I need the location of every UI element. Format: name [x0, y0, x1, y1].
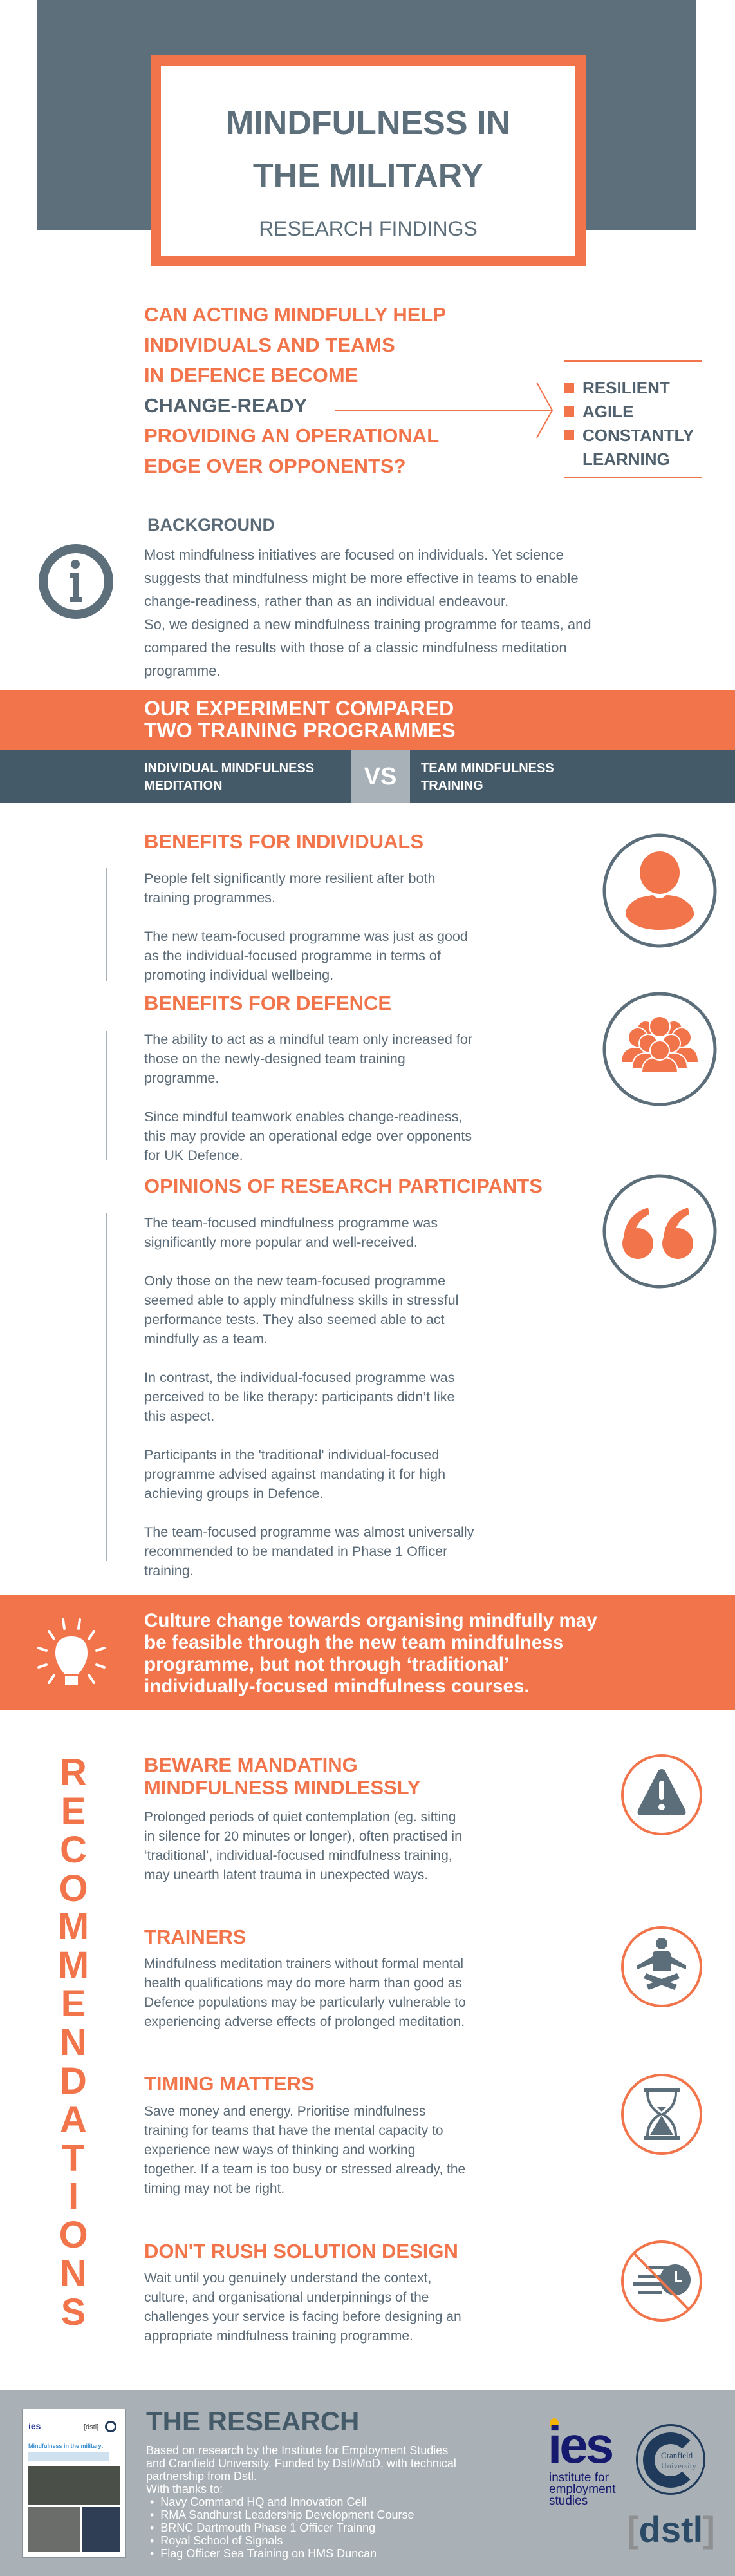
icon: no rushing — [621, 2240, 702, 2322]
outcome list: LEARNING — [582, 450, 670, 469]
right programme: TRAINING — [421, 779, 483, 793]
comparison band — [0, 750, 735, 803]
vs: VS — [364, 763, 396, 790]
background text: compared the results with those of a classic mindfulness meditation — [144, 639, 567, 656]
text: opinions: recommended to be mandated in Phase 1 Officer — [144, 1543, 447, 1559]
outcome list: AGILE — [582, 402, 633, 421]
text: timing — [144, 2104, 465, 2196]
text: beware: Prolonged periods of quiet contemplation (eg. sitting — [144, 1810, 456, 1824]
logo: cranfield: University — [661, 2461, 696, 2470]
text: opinions: mindfully as a team. — [144, 1331, 268, 1347]
text: opinions: achieving groups in Defence. — [144, 1485, 323, 1501]
vertical title: recommendations: O — [59, 2214, 88, 2256]
icon: quote — [602, 1175, 717, 1288]
outcome list: CONSTANTLY — [582, 426, 694, 445]
text: opinions: programme advised against mandating it for high — [144, 1466, 445, 1482]
question text — [144, 303, 446, 477]
text: beware — [144, 1810, 462, 1882]
logo: dstl: [dstl] — [627, 2509, 715, 2550]
callout text: be feasible through the new team mindfulness — [144, 1632, 563, 1653]
text: opinions: performance tests. They also seemed able to act — [144, 1311, 445, 1327]
logo: ies — [548, 2416, 615, 2508]
thanks list: • Flag Officer Sea Training on HMS Duncan — [150, 2547, 377, 2560]
text: benefits defence — [144, 1031, 472, 1163]
icon: person — [602, 833, 717, 948]
experiment band: OUR EXPERIMENT COMPARED — [144, 697, 454, 720]
text: benefits defence: programme. — [144, 1070, 219, 1086]
heading: trainers: TRAINERS — [144, 1926, 246, 1948]
vertical title: recommendations: M — [58, 1944, 89, 1986]
text: opinions: The team-focused mindfulness programme was — [144, 1215, 438, 1231]
thanks list: • Navy Command HQ and Innovation Cell — [150, 2496, 366, 2508]
background text: suggests that mindfulness might be more effective in teams to enable — [144, 570, 579, 586]
experiment band: TWO TRAINING PROGRAMMES — [144, 719, 456, 742]
report cover: Mindfulness in the military: — [28, 2443, 104, 2449]
heading: beware mandating: MINDFULNESS MINDLESSLY — [144, 1776, 420, 1799]
text: beware: in silence for 20 minutes or longer), often practised in — [144, 1829, 462, 1844]
text: timing: Save money and energy. Prioritise mindfulness — [144, 2104, 425, 2119]
text: benefits defence: this may provide an operational edge over opponents — [144, 1128, 472, 1144]
text: benefits individuals: promoting individual wellbeing. — [144, 967, 333, 983]
icon: warning — [621, 1754, 702, 1835]
question text: PROVIDING AN OPERATIONAL — [144, 424, 439, 447]
outcome list: RESILIENT — [582, 378, 670, 397]
thanks list — [150, 2496, 414, 2560]
text: opinions: this aspect. — [144, 1408, 214, 1424]
title — [226, 104, 510, 194]
text: timing: together. If a team is too busy or stressed already, the — [144, 2162, 465, 2177]
background text: programme. — [144, 663, 221, 679]
vertical title: recommendations: C — [60, 1829, 87, 1871]
text: timing: experience new ways of thinking and working — [144, 2143, 415, 2157]
vertical title: recommendations: N — [60, 2253, 87, 2295]
question text: INDIVIDUALS AND TEAMS — [144, 334, 395, 356]
left programme: MEDITATION — [144, 779, 222, 793]
left programme — [144, 761, 314, 793]
text: opinions: Only those on the new team-focused programme — [144, 1273, 445, 1289]
text: benefits individuals: training programmes. — [144, 889, 275, 905]
research text — [146, 2444, 456, 2496]
text: trainers — [144, 1956, 466, 2029]
right programme: TEAM MINDFULNESS — [421, 761, 554, 775]
arrow — [335, 383, 554, 438]
text: benefits defence: those on the newly-designed team training — [144, 1050, 405, 1066]
text: beware: ‘traditional’, individual-focused mindfulness training, — [144, 1848, 452, 1863]
text: opinions: training. — [144, 1562, 194, 1578]
culture callout band — [0, 1595, 735, 1710]
question text: CAN ACTING MINDFULLY HELP — [144, 303, 446, 326]
logo: ies: studies — [549, 2494, 588, 2508]
text: benefits individuals: People felt significantly more resilient after both — [144, 870, 435, 886]
vertical title: recommendations: A — [60, 2099, 87, 2141]
question text: IN DEFENCE BECOME — [144, 364, 358, 386]
experiment band — [0, 690, 735, 750]
thanks list: • RMA Sandhurst Leadership Development Course — [150, 2508, 414, 2521]
logo: cranfield — [636, 2424, 705, 2495]
text: benefits defence: Since mindful teamwork enables change-readiness, — [144, 1108, 463, 1124]
report cover: [dstl] — [84, 2423, 98, 2431]
heading: opinions: OPINIONS OF RESEARCH PARTICIPANTS — [144, 1175, 543, 1197]
text: opinions: seemed able to apply mindfulness skills in stressful — [144, 1292, 458, 1308]
logo: cranfield: Cranfield — [661, 2450, 693, 2460]
header banner — [37, 0, 696, 230]
logo: ies: institute for — [549, 2471, 609, 2485]
vertical title: recommendations: E — [61, 1983, 86, 2025]
background text: Most mindfulness initiatives are focused on individuals. Yet science — [144, 547, 564, 563]
icon: hourglass — [621, 2074, 702, 2155]
text: trainers: health qualifications may do more harm than good as — [144, 1976, 462, 1991]
research text: partnership from Dstl. — [146, 2470, 257, 2483]
text: benefits defence: The ability to act as a mindful team only increased for — [144, 1031, 472, 1047]
text: timing: timing may not be right. — [144, 2181, 284, 2196]
heading: don't rush: DON'T RUSH SOLUTION DESIGN — [144, 2240, 458, 2262]
right programme — [421, 761, 554, 793]
callout text: individually-focused mindfulness courses. — [144, 1676, 530, 1697]
text: benefits individuals — [144, 870, 468, 983]
text: don't rush: appropriate mindfulness training programme. — [144, 2329, 413, 2344]
vertical title: recommendations: M — [58, 1906, 89, 1947]
callout text — [144, 1610, 597, 1697]
logo: ies: ies — [548, 2416, 611, 2474]
text: don't rush — [144, 2271, 461, 2344]
text: opinions: perceived to be like therapy: participants didn’t like — [144, 1388, 455, 1405]
icon: lightbulb — [37, 1618, 106, 1685]
text: don't rush: culture, and organisational underpinnings of the — [144, 2290, 429, 2305]
text: opinions: The team-focused programme was almost universally — [144, 1524, 474, 1540]
text: don't rush: challenges your service is facing before designing an — [144, 2309, 461, 2324]
research heading: THE RESEARCH — [146, 2406, 359, 2436]
text: trainers: Defence populations may be particularly vulnerable to — [144, 1995, 466, 2010]
text: opinions — [144, 1215, 474, 1578]
vertical title: recommendations: S — [61, 2291, 86, 2333]
vertical title: recommendations: D — [60, 2060, 87, 2102]
icon: info — [39, 544, 113, 619]
text: trainers: Mindfulness meditation trainers without formal mental — [144, 1956, 463, 1971]
background text: So, we designed a new mindfulness training programme for teams, and — [144, 616, 591, 632]
vs — [351, 750, 410, 803]
text: trainers: experiencing adverse effects of prolonged meditation. — [144, 2014, 465, 2029]
callout text: programme, but not through ‘traditional’ — [144, 1654, 509, 1675]
text: benefits defence: for UK Defence. — [144, 1147, 243, 1163]
question text: CHANGE-READY — [144, 394, 307, 417]
text: benefits individuals: as the individual-focused programme in terms of — [144, 947, 441, 963]
title: MINDFULNESS IN — [226, 104, 510, 142]
vertical title: recommendations: R — [60, 1752, 87, 1794]
text: opinions: In contrast, the individual-focused programme was — [144, 1369, 454, 1385]
text: opinions: Participants in the 'traditional' individual-focused — [144, 1446, 439, 1463]
footer: the research — [0, 2390, 735, 2576]
vertical title: recommendations: N — [60, 2022, 87, 2063]
research text: Based on research by the Institute for Employment Studies — [146, 2444, 448, 2457]
background text: change-readiness, rather than as an individual endeavour. — [144, 593, 508, 609]
vertical title: recommendations: I — [68, 2175, 79, 2217]
title box — [151, 55, 586, 266]
research text: With thanks to: — [146, 2483, 223, 2496]
logo: ies: employment — [549, 2483, 615, 2496]
text: opinions: significantly more popular and well-received. — [144, 1234, 418, 1250]
thanks list: • BRNC Dartmouth Phase 1 Officer Trainng — [150, 2521, 375, 2534]
left programme: INDIVIDUAL MINDFULNESS — [144, 761, 314, 775]
report cover — [22, 2409, 126, 2558]
icon: meditation — [621, 1926, 702, 2007]
callout text: Culture change towards organising mindfully may — [144, 1610, 597, 1631]
heading: benefits individuals: BENEFITS FOR INDIVIDUALS — [144, 830, 423, 853]
heading: beware mandating — [144, 1754, 420, 1799]
text: benefits individuals: The new team-focused programme was just as good — [144, 928, 468, 944]
background text — [144, 547, 591, 679]
text: don't rush: Wait until you genuinely understand the context, — [144, 2271, 431, 2286]
title: THE MILITARY — [253, 157, 483, 194]
text: beware: may unearth latent trauma in unexpected ways. — [144, 1868, 428, 1882]
text: timing: training for teams that have the mental capacity to — [144, 2123, 443, 2138]
icon: team — [602, 992, 717, 1106]
research text: and Cranfield University. Funded by Dstl/MoD, with technical — [146, 2457, 456, 2470]
vertical title: recommendations — [58, 1752, 89, 2333]
background heading: BACKGROUND — [147, 515, 275, 535]
heading: timing matters: TIMING MATTERS — [144, 2072, 315, 2095]
vertical title: recommendations: E — [61, 1790, 86, 1832]
vertical title: recommendations: O — [59, 1868, 88, 1909]
vertical title: recommendations: T — [62, 2137, 85, 2179]
heading: benefits defence: BENEFITS FOR DEFENCE — [144, 992, 391, 1014]
heading: beware mandating: BEWARE MANDATING — [144, 1754, 358, 1776]
thanks list: • Royal School of Signals — [150, 2534, 283, 2547]
report cover: ies — [28, 2421, 41, 2431]
question text: EDGE OVER OPPONENTS? — [144, 455, 406, 477]
outcome list — [564, 360, 702, 478]
subtitle: RESEARCH FINDINGS — [259, 217, 478, 240]
